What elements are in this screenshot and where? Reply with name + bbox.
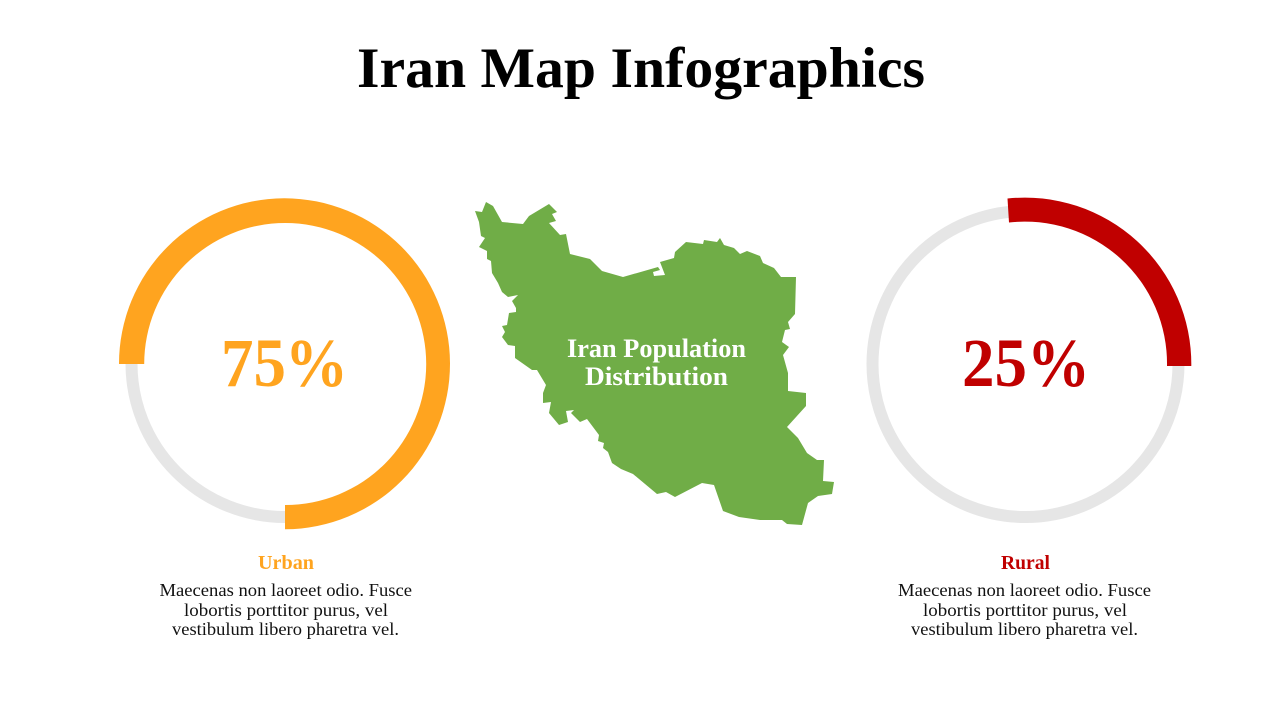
text block: rural description: vestibulum libero pharetra vel. (911, 619, 1138, 639)
text block: rural description: Maecenas non laoreet odio. Fusce (898, 580, 1151, 600)
text block: urban description: lobortis porttitor purus, vel (184, 600, 388, 620)
donut chart: urban 75% (119, 198, 450, 529)
text block: urban description: Maecenas non laoreet odio. Fusce (160, 580, 412, 600)
title: Iran Map Infographics (357, 37, 925, 100)
heading: urban: Urban (258, 552, 315, 574)
heading: rural: Rural (1001, 552, 1050, 574)
donut chart: rural 25% (872, 198, 1191, 517)
text block: rural description (898, 580, 1151, 639)
map label (567, 333, 746, 391)
value: 25% (962, 325, 1090, 401)
text block: urban description (160, 580, 412, 639)
value: 25%: 25 (962, 325, 1027, 401)
value: 75%: % (285, 325, 348, 401)
map label: Distribution (585, 361, 728, 391)
text block: urban description: vestibulum libero pharetra vel. (172, 619, 399, 639)
value: 75% (221, 325, 348, 401)
text block: rural description: lobortis porttitor purus, vel (923, 600, 1127, 620)
panel: rural (872, 198, 1191, 639)
map label: Iran Population (567, 333, 746, 363)
value: 75%: 75 (221, 325, 286, 401)
map: iran silhouette (475, 202, 834, 525)
panel: urban (119, 198, 450, 639)
panel: iran map (475, 202, 834, 525)
value: 25%: % (1027, 325, 1090, 401)
